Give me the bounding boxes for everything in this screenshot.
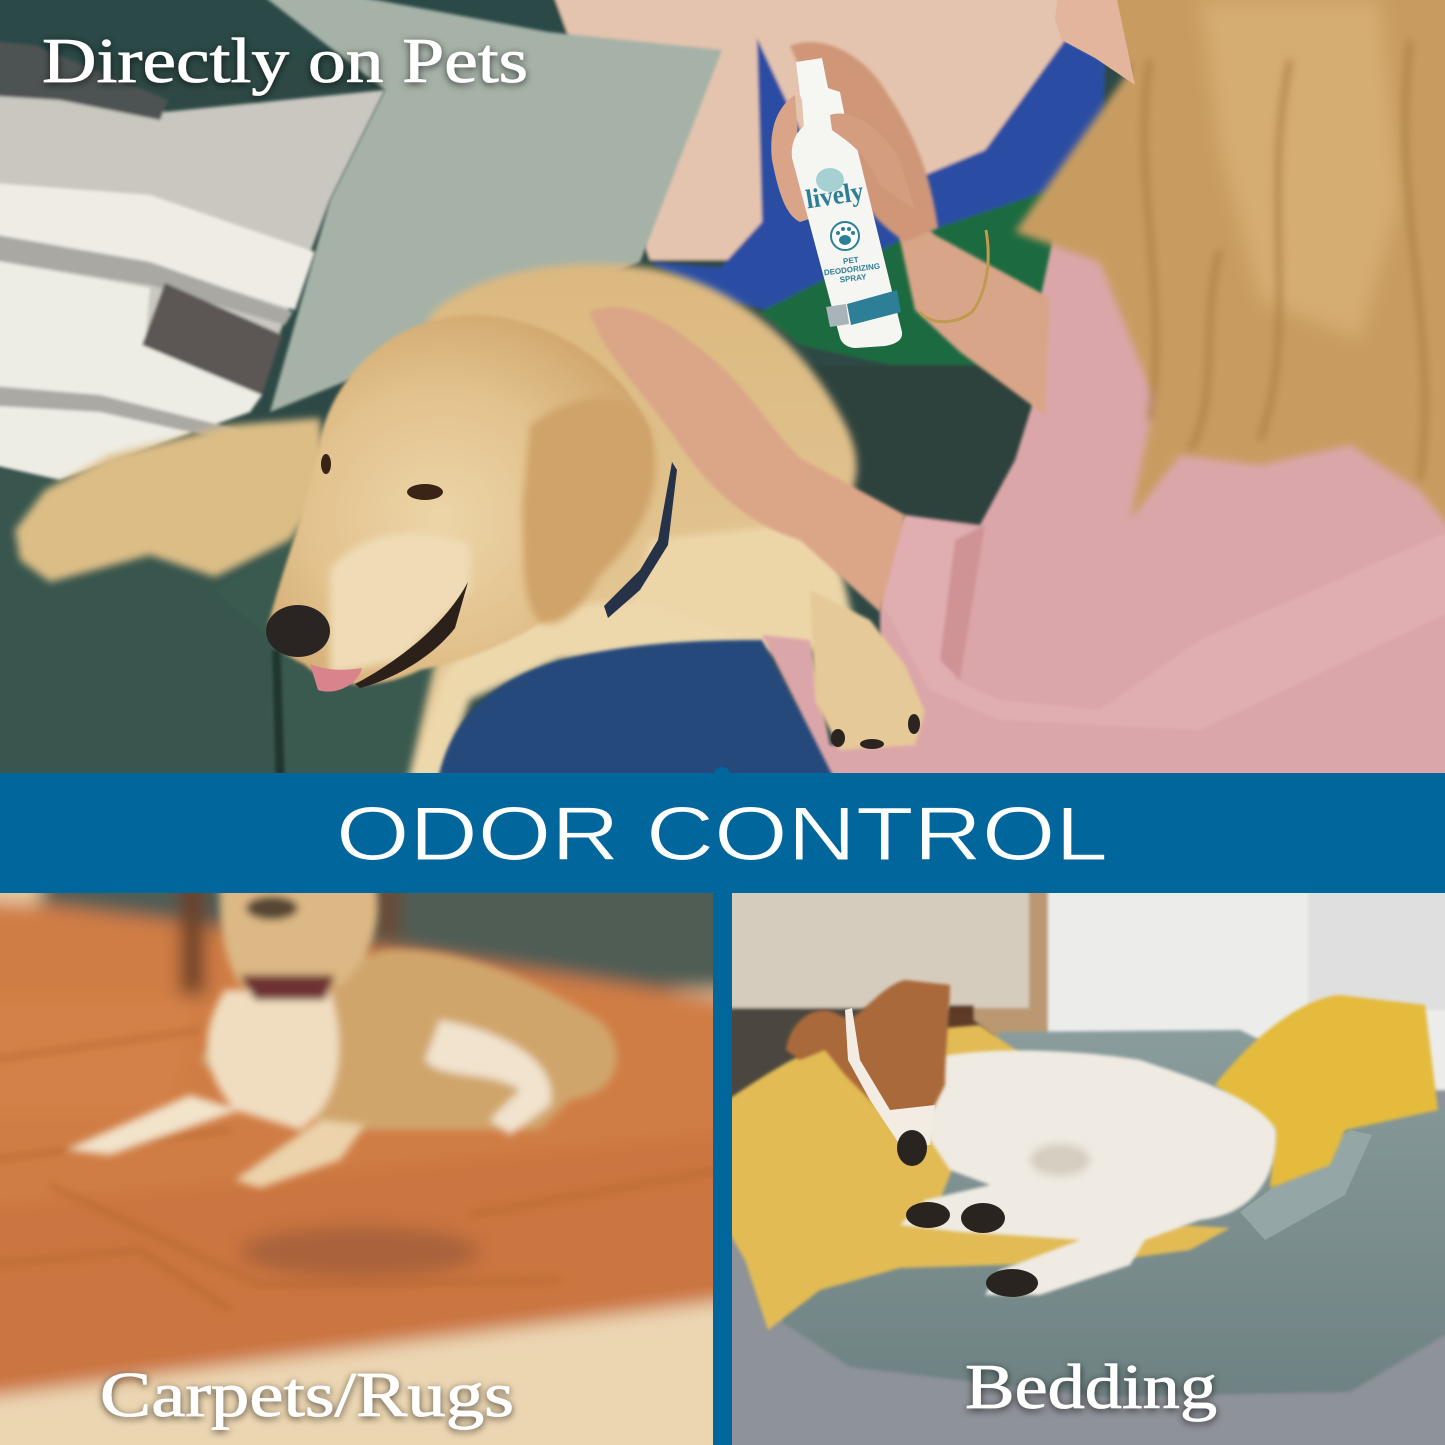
vertical divider	[713, 893, 732, 1445]
dog collar	[604, 462, 677, 618]
blurred dog	[65, 880, 617, 1188]
striped cushion	[0, 40, 385, 480]
hand holding bottle	[790, 42, 938, 242]
label: bedding: Bedding	[965, 1351, 1217, 1422]
bottle label stripe	[847, 290, 901, 325]
dog tail	[15, 418, 328, 582]
bracelet	[920, 230, 988, 322]
pet bed	[782, 1030, 1445, 1397]
dog body	[400, 264, 860, 780]
dog head	[786, 980, 950, 1125]
dog eyes	[321, 454, 443, 500]
dog body spots	[1030, 1144, 1090, 1176]
dog nose	[266, 605, 330, 657]
banner notch	[714, 767, 730, 773]
hair	[1015, 0, 1445, 560]
boucle cushion	[262, 0, 722, 412]
label: directly on pets: Directly on Pets	[42, 25, 528, 96]
finger over bottle	[830, 114, 858, 151]
dog paw	[810, 590, 925, 750]
bed rim highlight	[1240, 1130, 1372, 1240]
dog ear	[522, 398, 656, 624]
yellow blanket right	[1215, 995, 1438, 1188]
pink shirt	[762, 240, 1445, 773]
product name: SPRAY	[839, 272, 868, 285]
banner title: ODOR CONTROL	[336, 792, 1108, 877]
bottle label texture	[826, 304, 849, 327]
brand name: lively	[804, 176, 866, 214]
blurred room scene	[0, 893, 713, 1445]
paw badge	[831, 222, 859, 250]
panel: directly on pets photo	[0, 0, 1445, 800]
raised arm	[900, 205, 1050, 415]
spray bottle	[792, 58, 915, 348]
product name: PET	[843, 255, 859, 266]
rug grid lines	[0, 1028, 224, 1206]
panel: bedding photo	[710, 880, 1445, 1445]
face	[1055, 0, 1135, 85]
sleeping dog body	[900, 1051, 1276, 1295]
dog mouth	[355, 582, 468, 688]
banner: odor control	[0, 767, 1445, 893]
paw claws	[831, 714, 920, 749]
brand mark	[816, 168, 844, 192]
product name: DEODORIZING	[823, 262, 881, 277]
head blaze	[845, 1008, 935, 1145]
product name	[824, 256, 880, 282]
label: carpets and rugs: Carpets/Rugs	[100, 1359, 514, 1430]
room background	[710, 880, 1445, 1445]
petting hand and arm	[590, 307, 905, 612]
dog tongue	[310, 664, 362, 692]
dog nose and paws	[897, 1130, 1038, 1297]
dog head	[266, 315, 677, 692]
jeans	[438, 640, 845, 780]
yellow blanket left	[710, 1025, 1230, 1330]
scene: sofa and wall backdrop	[0, 0, 1133, 773]
panel: carpets and rugs photo	[0, 893, 713, 1445]
hair strands	[1144, 40, 1425, 480]
